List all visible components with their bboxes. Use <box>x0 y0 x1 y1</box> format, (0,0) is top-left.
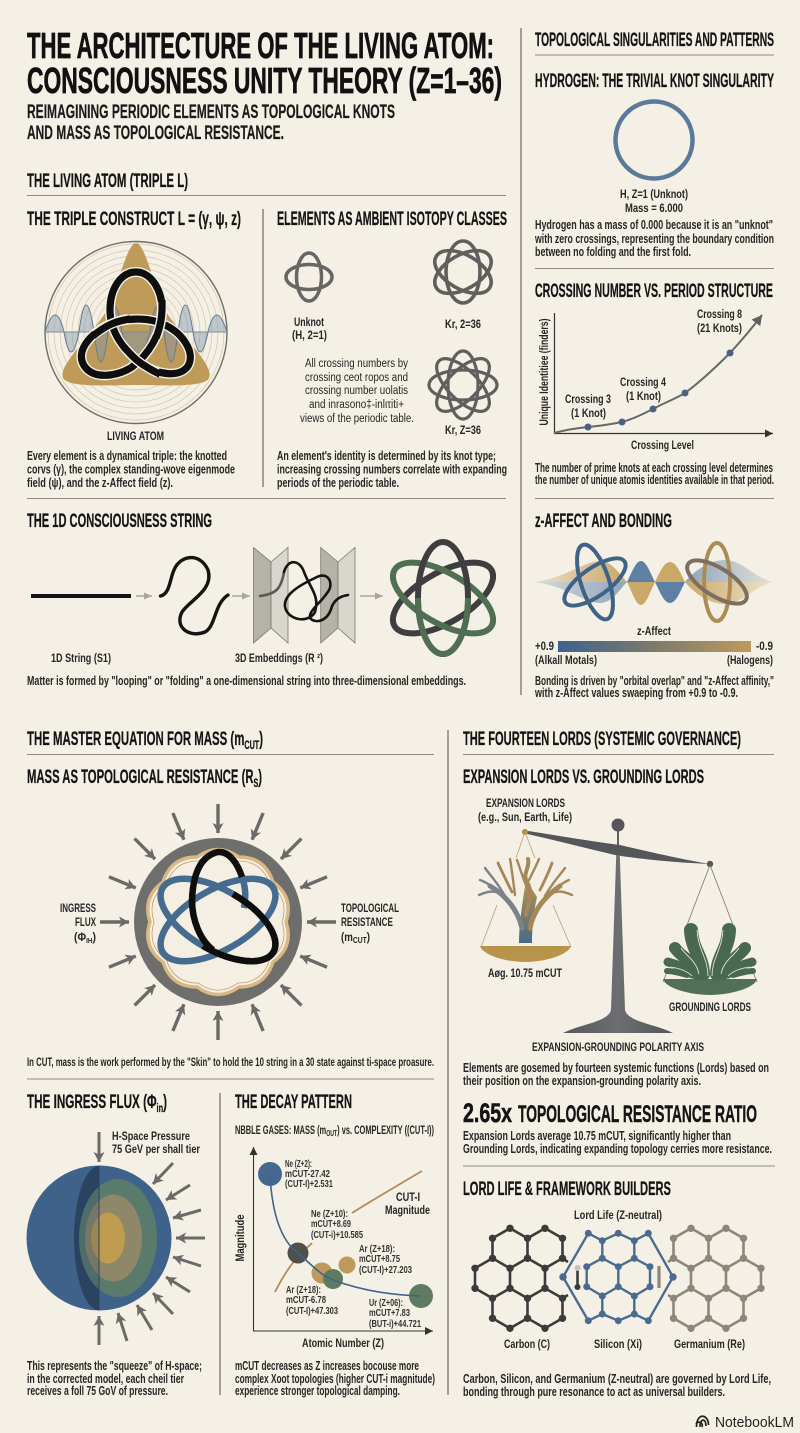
unknot label: (H, 2=1) <box>292 330 327 342</box>
embedded knot string <box>260 562 348 621</box>
lattice labels: Carbon (C) <box>504 1339 550 1351</box>
mass decay curve <box>270 1175 420 1296</box>
ring label <box>620 189 688 215</box>
heading: z-AFFECT AND BONDING <box>535 511 672 532</box>
axes <box>252 1147 254 1331</box>
ring label: Mass = 6.000 <box>625 203 683 215</box>
point labels: Ne (Z+2): <box>285 1159 312 1170</box>
heading: THE 1D CONSCIOUSNESS STRING <box>27 511 212 532</box>
left callout: ingress flux: FLUX <box>75 917 96 929</box>
body text <box>27 449 235 490</box>
point labels: mCUT+8.75 <box>359 1254 400 1265</box>
body text: This represents the "squeeze" of H-space; <box>27 1359 202 1373</box>
body text <box>534 674 774 700</box>
curve label <box>385 1192 430 1217</box>
scale labels: (Alkall Motals) <box>535 655 597 667</box>
y axis label: Unique Identitiee (finders) <box>539 318 551 426</box>
body text: periods of the periodic table. <box>277 476 399 490</box>
skin and knot diagram <box>134 838 302 1006</box>
subtitle: AND MASS AS TOPOLOGICAL RESISTANCE. <box>27 123 284 144</box>
point labels <box>565 309 742 420</box>
panel: ambient isotopy classes <box>277 209 507 490</box>
panel: resistance ratio <box>463 1098 772 1156</box>
left callout: ingress flux: IH <box>86 938 92 945</box>
main title: THE ARCHITECTURE OF THE LIVING ATOM: <box>27 25 494 66</box>
body text <box>277 449 507 490</box>
point labels: (CUT-I)+27.203 <box>359 1265 412 1276</box>
final knot <box>382 542 504 654</box>
panel: hydrogen <box>534 71 774 259</box>
heading: in <box>157 1101 163 1115</box>
heading: MASS AS TOPOLOGICAL RESISTANCE (R <box>27 767 408 788</box>
centre note: crossing number uolatis <box>305 385 408 397</box>
growth curve <box>554 315 762 433</box>
x axis label: Crossing Level <box>631 440 694 452</box>
decay chart <box>235 1147 433 1350</box>
section: topological singularities <box>534 30 774 700</box>
pan and axis labels: GROUNDING LORDS <box>669 1002 751 1014</box>
CUT-I curve <box>275 1171 422 1292</box>
strings <box>481 832 571 947</box>
NotebookLM wordmark: NotebookLM <box>715 1414 794 1431</box>
point labels: Ne (Z+10): <box>311 1209 348 1220</box>
right callout: topological resistance: TOPOLOGICAL <box>341 903 399 915</box>
lattice: silicon <box>560 1230 676 1324</box>
pan and axis labels: Aøg. 10.75 mCUT <box>488 968 562 980</box>
bubbles <box>258 1162 433 1308</box>
arrow 2 <box>232 595 250 597</box>
body text: In CUT, mass is the work performed by the "Skin" to hold the 10 string in a 30 state against ti-space proasure. <box>27 1057 434 1069</box>
point labels: mCUT+7.83 <box>369 1308 410 1319</box>
heading: S <box>253 776 258 790</box>
point labels: Crossing 3 <box>565 394 611 406</box>
straight string <box>31 594 131 598</box>
scale labels <box>535 641 773 667</box>
icon: plant on green pan <box>663 930 757 995</box>
point labels: (1 Knot) <box>626 391 661 403</box>
point labels: (21 Knots) <box>697 323 742 335</box>
pan and axis labels <box>488 968 751 1054</box>
point labels: Ur (Z+06): <box>369 1298 403 1309</box>
pressure label <box>112 1131 200 1156</box>
point labels: Ar (Z+18): <box>286 1285 321 1296</box>
living atom caption: LIVING ATOM <box>107 431 164 443</box>
point labels: (1 Knot) <box>571 408 606 420</box>
body text <box>534 218 774 259</box>
body text: Every element is a dynamical triple: the knotted <box>27 449 227 463</box>
unknot label <box>292 317 327 342</box>
unknot label: Unknot <box>294 317 324 329</box>
body text <box>27 1359 202 1398</box>
centre note: and inrasono‡-inlιτiti+ <box>309 399 404 411</box>
lattice labels <box>504 1339 745 1351</box>
main title <box>27 25 502 101</box>
section: fourteen lords <box>463 729 775 1399</box>
heading: THE INGRESS FLUX (Φ <box>27 1092 238 1113</box>
curve label: Magnitude <box>385 1205 430 1217</box>
decay chart: Atomic Number (Z) <box>302 1338 384 1350</box>
body text <box>463 1129 772 1156</box>
axes <box>554 313 773 434</box>
left callout: ingress flux: ) <box>92 932 96 944</box>
heading: ELEMENTS AS AMBIENT ISOTOPY CLASSES <box>277 209 507 230</box>
body text: their position on the expansion-grounding polarity axis. <box>463 1074 701 1088</box>
looped string <box>160 558 228 634</box>
gradient scale <box>558 641 751 652</box>
left callout: ingress flux: INGRESS <box>60 903 96 915</box>
title block <box>27 25 502 144</box>
panel: mass as resistance <box>27 767 434 1069</box>
caption: Lord Life (Z-neutral) <box>574 1210 662 1222</box>
panel: ingress flux <box>26 1092 205 1398</box>
point labels: (CUT-I)+2.531 <box>285 1179 333 1190</box>
ratio stat: 2.65x <box>463 1098 512 1128</box>
point labels: mCUT+8.69 <box>311 1219 351 1230</box>
living atom diagram <box>45 242 227 424</box>
section: master equation <box>26 729 435 1398</box>
right callout: topological resistance <box>341 903 399 945</box>
body text: in the corrected model, each cheil tier <box>27 1372 184 1386</box>
scale labels: (Halogens) <box>727 655 773 667</box>
expansion label: EXPANSION LORDS <box>486 798 565 810</box>
folding planes <box>254 548 355 643</box>
icon: krypton knot B <box>428 350 498 420</box>
body text: corvs (γ), the complex standing-wove eigenmode <box>27 462 235 476</box>
icon: unknot ring <box>616 102 692 178</box>
ring label: H, Z=1 (Unknot) <box>620 189 688 201</box>
panel: decay pattern <box>235 1092 435 1398</box>
heading: THE DECAY PATTERN <box>235 1092 352 1113</box>
body text: increasing crossing numbers correlate with expanding <box>277 462 507 476</box>
icon: unknot <box>286 253 332 301</box>
section heading: CUT <box>244 738 260 752</box>
body text: An element's identity is determined by its knot type; <box>277 449 496 463</box>
body text: field (ψ), and the z-Affect field (z). <box>27 476 173 490</box>
pressure label: 75 GeV per shall tier <box>112 1144 200 1156</box>
point labels: (CUT-I)+47.303 <box>286 1306 338 1317</box>
panel: crossing number <box>535 281 774 487</box>
body text <box>463 1372 771 1399</box>
string labels: 1D String (S1) <box>51 653 111 665</box>
scale labels: -0.9 <box>756 641 773 653</box>
panel: z-affect <box>534 511 774 700</box>
chart subtitle: ) vs. COMPLEXITY ((CUT-I)) <box>337 1125 434 1137</box>
lattice labels: Silicon (Xi) <box>594 1339 642 1351</box>
knot label B: Kr, Z=36 <box>445 425 481 437</box>
section heading: THE MASTER EQUATION FOR MASS (m <box>27 729 389 750</box>
icon: krypton knot A <box>428 241 498 303</box>
body text: between no folding and the first fold. <box>535 245 691 259</box>
bridging atoms <box>574 1265 659 1290</box>
section heading: ) <box>259 729 263 750</box>
subtitle: REIMAGINING PERIODIC ELEMENTS AS TOPOLOGICAL KNOTS <box>27 102 395 123</box>
sphere cross-section <box>26 1166 172 1310</box>
heading: THE TRIPLE CONSTRUCT L = (γ, ψ, z) <box>27 209 241 230</box>
lattice labels: Germanium (Re) <box>674 1339 745 1351</box>
arrow 1 <box>136 595 152 597</box>
knot: alkali metals <box>557 541 633 623</box>
centre note: views of the periodic table. <box>300 413 414 425</box>
centre note: crossing ceot ropos and <box>305 372 408 384</box>
icon: tree on gold pan <box>479 859 572 962</box>
expansion label: (e.g., Sun, Earth, Life) <box>478 812 572 824</box>
point labels: Ar (Z+18): <box>359 1244 395 1255</box>
axis labels: Magnitude <box>235 1214 247 1262</box>
string labels <box>51 653 323 665</box>
knot label A: Kr, 2=36 <box>445 319 481 331</box>
data points <box>584 350 734 430</box>
knot: halogens <box>681 543 753 621</box>
body text: Matter is formed by "looping" or "folding" a one-dimensional string into three-dimensional embeddings. <box>27 674 466 688</box>
point labels: (BUT-i)+44.721 <box>369 1319 421 1330</box>
body text: experience stronger topological damping. <box>235 1384 400 1398</box>
line chart <box>539 309 773 452</box>
subtitle <box>27 102 395 144</box>
body text: mCUT decreases as Z increases bocouse more <box>235 1359 419 1373</box>
section: the living atom <box>27 171 507 490</box>
expansion label <box>478 798 572 824</box>
chart subtitle: NBBLE GASES: MASS (m <box>235 1125 376 1137</box>
inward arrows <box>100 804 336 1040</box>
centre note <box>300 358 414 425</box>
icon: NotebookLM logo <box>696 1416 708 1427</box>
arrow 3 <box>360 595 383 597</box>
lattice: carbon <box>472 1225 568 1332</box>
pan and axis labels: EXPANSION-GROUNDING POLARITY AXIS <box>532 1042 704 1054</box>
lattice: germanium <box>668 1225 764 1332</box>
heading: ) <box>258 767 262 788</box>
point labels: mCUT-27.42 <box>285 1169 330 1180</box>
right callout: topological resistance: CUT <box>353 936 367 945</box>
panel: lord life <box>463 1179 771 1399</box>
string labels: 3D Embeddings (R ²) <box>235 653 323 665</box>
body text: receives a foll 75 GoV of pressure. <box>27 1384 168 1398</box>
point labels: mCUT-6.78 <box>286 1295 326 1306</box>
chart subtitle: OUT <box>326 1129 337 1138</box>
point labels: (CUT-i)+10.585 <box>311 1230 363 1241</box>
body text <box>235 1359 435 1398</box>
pressure arrows <box>99 1132 205 1345</box>
panel: triple construct <box>27 209 241 490</box>
point labels: Crossing 8 <box>697 309 742 321</box>
body text: complex Xoot topologies (higher CUT-i magnitude) <box>235 1372 435 1386</box>
panel: 1D consciousness string <box>27 511 504 688</box>
main title: CONSCIOUSNESS UNITY THEORY (Z=1–36) <box>27 60 502 101</box>
right callout: topological resistance: (m <box>341 932 355 944</box>
body text <box>463 1061 769 1088</box>
pressure label: H-Space Pressure <box>112 1131 190 1143</box>
curve label: CUT-I <box>396 1192 420 1204</box>
left callout: ingress flux <box>60 903 96 945</box>
point labels: Crossing 4 <box>620 377 666 389</box>
right callout: topological resistance: ) <box>367 932 370 944</box>
standing wave <box>535 560 773 605</box>
panel: expansion vs grounding <box>463 767 769 1088</box>
section heading: THE LIVING ATOM (TRIPLE L) <box>27 171 188 192</box>
z-affect label: z-Affect <box>637 626 671 638</box>
right callout: topological resistance: RESISTANCE <box>341 917 393 929</box>
heading: ) <box>163 1092 167 1113</box>
body text <box>535 461 774 487</box>
trefoil knot <box>81 272 190 375</box>
scale labels: +0.9 <box>535 641 554 653</box>
balance scale <box>481 818 757 1033</box>
point labels <box>285 1159 421 1330</box>
left callout: ingress flux: (Φ <box>74 932 87 944</box>
centre note: All crossing numbers by <box>305 358 408 370</box>
